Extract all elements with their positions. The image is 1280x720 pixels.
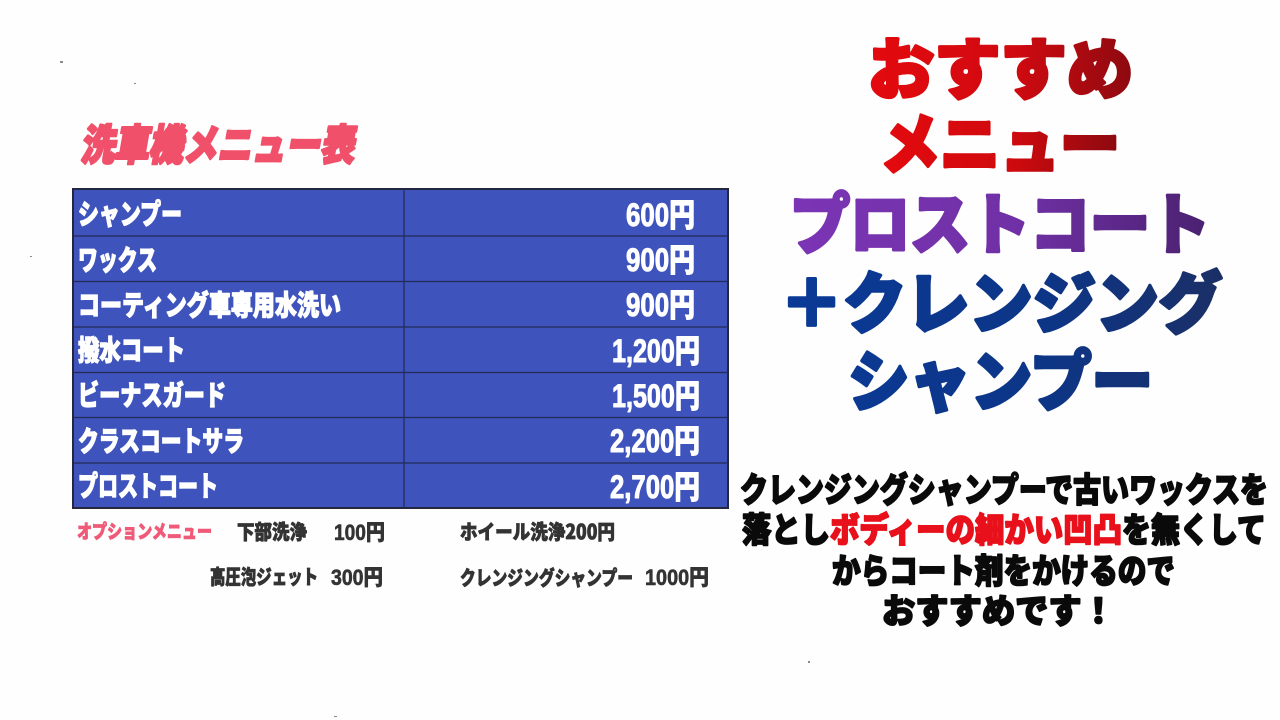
option: cleansing shampoo: 1000円 (645, 565, 709, 590)
row: water repellent coat: 1,200円 (612, 333, 700, 369)
row: coated car water wash: 900円 (626, 287, 695, 323)
menu heading: 洗車機メニュー表 (78, 112, 362, 173)
option: underbody wash (237, 516, 385, 545)
scan specks (30, 61, 810, 717)
row: wax: 900円 (626, 242, 695, 278)
recommendation title (780, 17, 1222, 425)
explanation line 2: 落とし (742, 503, 830, 552)
row: shampoo (78, 193, 695, 233)
row: coated car water wash: コーティング車専用水洗い (78, 284, 341, 324)
row: venus guard (78, 374, 700, 414)
row: venus guard: ビーナスガード (78, 374, 226, 414)
table background (73, 189, 728, 508)
title line: frost coat: プロストコート (790, 172, 1210, 268)
title line: plus cleansing: ＋クレンジング (780, 251, 1222, 347)
row: venus guard: 1,500円 (612, 378, 700, 414)
option: wheel wash: ホイール洗浄200円 (460, 516, 615, 545)
row: shampoo: シャンプー (78, 193, 182, 233)
option: foam jet: 300円 (331, 565, 383, 590)
row: wax (78, 239, 695, 279)
row: water repellent coat (78, 329, 700, 369)
explanation line 2 (742, 503, 1266, 552)
title line: osusume: おすすめ (868, 17, 1133, 113)
row: frost coat (78, 465, 700, 505)
option menu label: オプションメニュー (77, 517, 212, 544)
option menu (77, 516, 709, 591)
explanation line 2: ボディーの細かい凹凸 (830, 503, 1122, 552)
row: frost coat: プロストコート (78, 465, 218, 505)
option: foam jet: 高圧泡ジェット (210, 561, 318, 590)
table row lines (73, 189, 728, 508)
option: cleansing shampoo: クレンジングシャンプー (460, 562, 633, 591)
row: frost coat: 2,700円 (610, 469, 700, 505)
row: glass coat sara: クラスコートサラ (78, 420, 244, 460)
row: water repellent coat: 撥水コート (78, 329, 185, 369)
panel: price table (73, 189, 728, 508)
explanation line 3: からコート剤をかけるので (832, 544, 1175, 593)
title line: shampoo: シャンプー (848, 329, 1153, 425)
explanation text (740, 463, 1268, 633)
row: glass coat sara (78, 420, 700, 460)
option: underbody wash: 100円 (334, 520, 385, 545)
explanation line 4: おすすめです！ (882, 584, 1115, 633)
row: wax: ワックス (78, 239, 157, 279)
title line: menu: メニュー (880, 92, 1120, 188)
option: underbody wash: 下部洗浄 (237, 516, 307, 545)
row: glass coat sara: 2,200円 (610, 423, 700, 459)
row: shampoo: 600円 (626, 197, 695, 233)
row: coated car water wash (78, 284, 695, 324)
